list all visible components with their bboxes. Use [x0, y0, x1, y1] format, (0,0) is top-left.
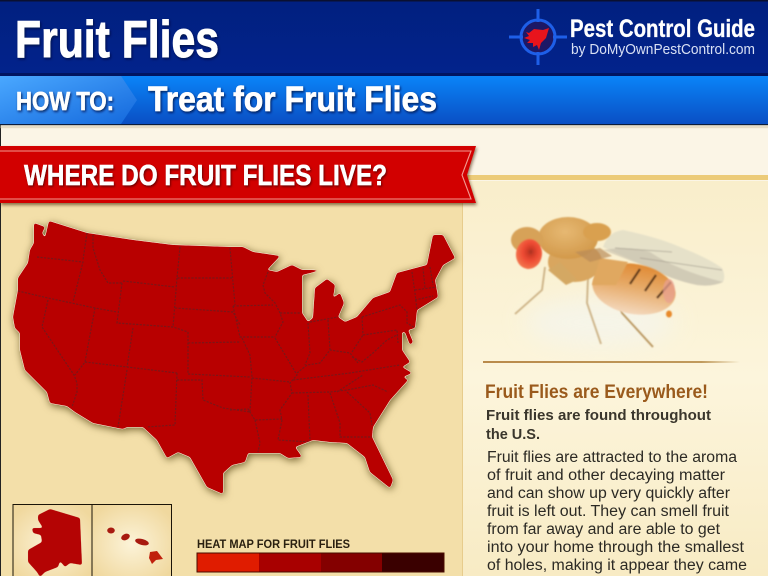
- banner heading: WHERE DO FRUIT FLIES LIVE?: [24, 160, 387, 192]
- abdomen: [588, 257, 680, 321]
- logo: pest control guide: by DoMyOwnPestControl.com: [571, 42, 755, 58]
- inset: Alaska: [13, 504, 92, 576]
- legs: [515, 267, 653, 347]
- panel: fly and text background: [463, 181, 768, 576]
- text subheading: the U.S.: [486, 427, 540, 443]
- US heat map: [13, 221, 455, 494]
- logo: pest control guide: [509, 9, 755, 65]
- inset maps: [13, 504, 172, 576]
- text body: of holes, making it appear they came: [487, 557, 747, 574]
- icon: crosshair with bug: [509, 9, 567, 65]
- inset: Hawaii: [92, 504, 172, 576]
- text body: from far away and are able to get: [487, 521, 721, 538]
- section banner: [0, 146, 476, 203]
- heat map legend: [197, 539, 444, 572]
- gold rule: [466, 175, 768, 180]
- text body: of fruit and other decaying matter: [487, 467, 725, 484]
- chevron: how to: [0, 76, 137, 124]
- how to heading: Treat for Fruit Flies: [148, 80, 437, 119]
- thorax: [538, 217, 628, 285]
- text subheading: [486, 408, 711, 443]
- text body: fruit is left out. They can smell fruit: [487, 503, 730, 520]
- state borders: [18, 233, 437, 452]
- legend label: HEAT MAP FOR FRUIT FLIES: [197, 539, 350, 551]
- text body: and can show up very quickly after: [487, 485, 730, 502]
- header band: [0, 0, 768, 76]
- wings: [603, 230, 724, 286]
- divider: [483, 361, 740, 363]
- how-to bar: [0, 76, 768, 128]
- text heading: Fruit Flies are Everywhere!: [485, 382, 708, 403]
- text body: Fruit flies are attracted to the aroma: [487, 449, 737, 466]
- legend scale: [197, 553, 444, 572]
- head and eye: [511, 227, 544, 271]
- title: Fruit Flies: [15, 11, 219, 69]
- how to label: HOW TO:: [16, 86, 114, 116]
- map outline: [13, 221, 455, 494]
- text body: into your home through the smallest: [487, 539, 745, 556]
- pale photo backdrop: [525, 298, 675, 346]
- panel: map background: [1, 178, 462, 576]
- text block: fruit flies are everywhere: [485, 382, 747, 574]
- text body: [487, 449, 747, 574]
- text subheading: Fruit flies are found throughout: [486, 408, 711, 424]
- fruit fly photo: [511, 217, 724, 347]
